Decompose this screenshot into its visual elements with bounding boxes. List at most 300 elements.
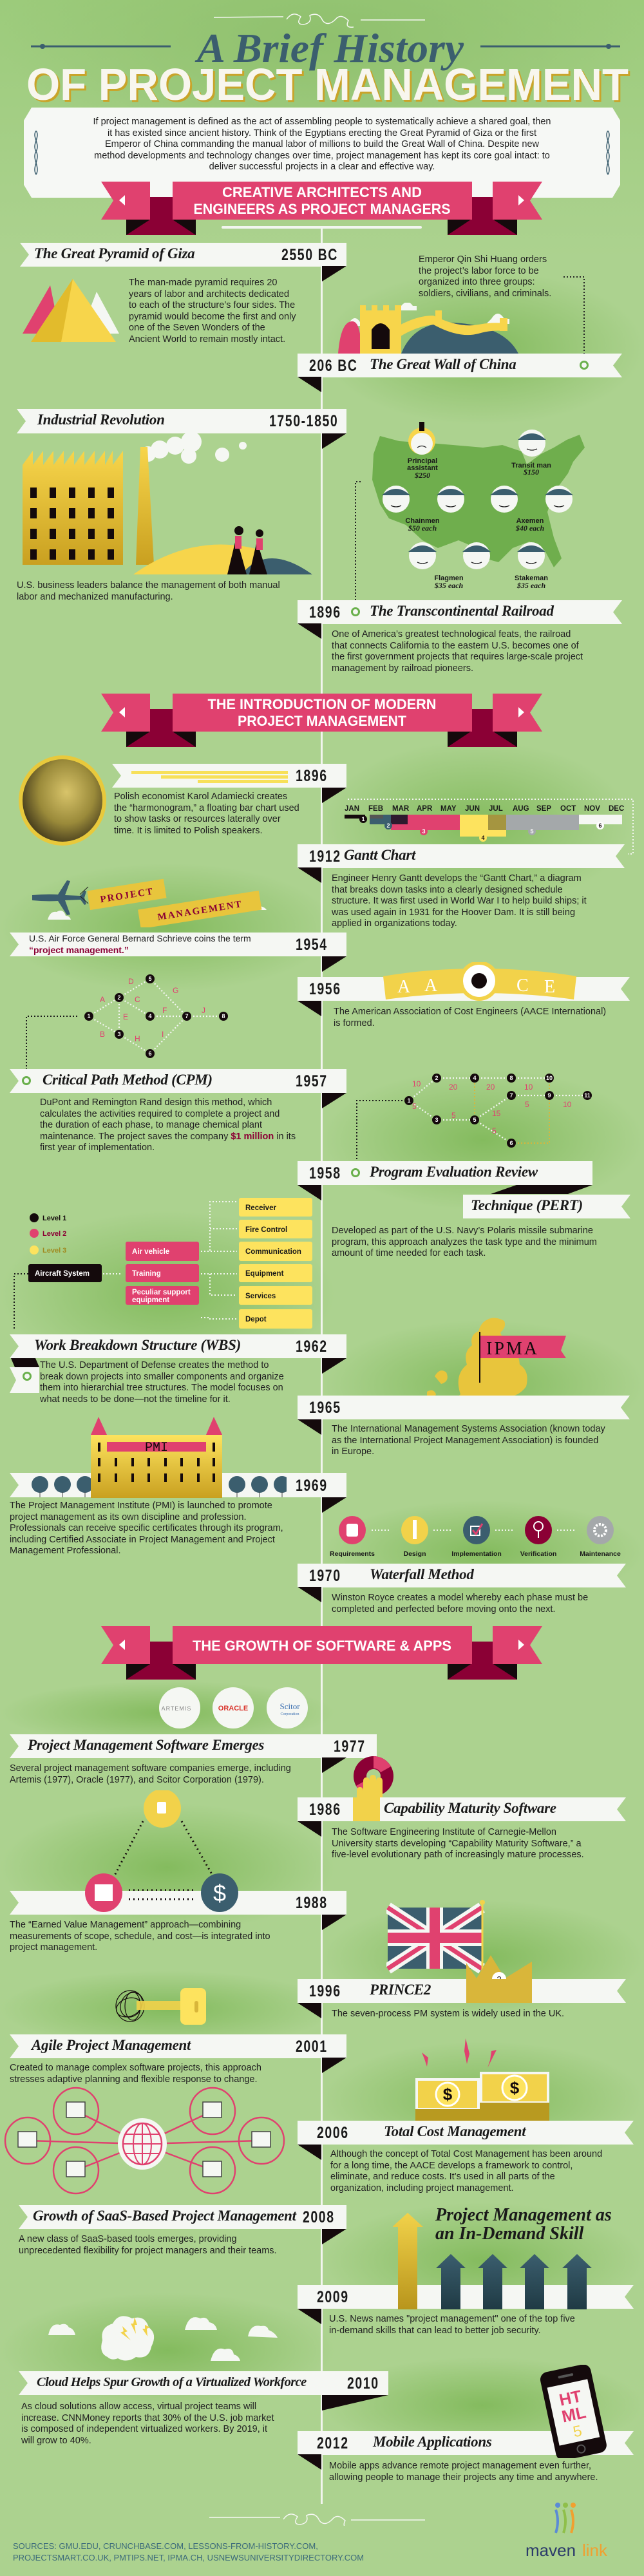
text: CMM: The Software Engineering Institute of Carnegie-Mellon — [332, 1827, 556, 1837]
ribbon: CMM 1986: Capability Maturity Software — [384, 1800, 556, 1816]
text: emperor: Emperor Qin Shi Huang orders — [419, 254, 547, 265]
text: mobile — [329, 2461, 598, 2483]
network diagram: CPM: F — [162, 1006, 167, 1015]
ribbon: virtualized workforce 2010 — [19, 2371, 388, 2395]
logos: artemis, oracle, scitor: Scitor — [279, 1701, 300, 1711]
ribbon: total cost management 2006 — [298, 2121, 634, 2145]
text: software: Several project management software companies emerge, including — [10, 1763, 291, 1774]
WBS diagram: Level 3 — [43, 1247, 66, 1255]
icon: phone HTML5: ML — [560, 2402, 588, 2426]
text: emperor: the project’s labor force to be — [419, 266, 539, 276]
section banner: modern project management: PROJECT MANAGEMENT — [238, 713, 407, 729]
network diagram: PERT: 10 — [546, 1075, 553, 1081]
text: harmonogram — [114, 791, 299, 836]
text: PERT: program, this approach analyzes the task type and the minimum — [332, 1237, 597, 1247]
map: transcontinental railroad workers: Transit man — [511, 462, 551, 469]
ribbon: CPM 1957: 1957 — [296, 1072, 328, 1090]
network diagram: PERT: 10 — [524, 1083, 533, 1092]
gantt chart: 1 — [361, 816, 365, 822]
ribbon: PERT 1958 — [298, 1161, 592, 1185]
text: PMI: The Project Management Institute (PMI) is launched to promote — [10, 1501, 272, 1511]
icon: great wall — [338, 303, 518, 354]
network diagram: PERT: 2 — [435, 1075, 439, 1081]
network diagram: CPM: 7 — [185, 1013, 189, 1019]
map: transcontinental railroad workers: Axemen — [516, 517, 544, 525]
ribbon: CPM 1957 — [10, 1069, 346, 1093]
text: gantt: applied in organizations today. — [332, 918, 457, 929]
heading: in-demand skill — [435, 2206, 629, 2246]
text: total cost — [330, 2149, 602, 2194]
map: transcontinental railroad workers: Chainmen — [405, 517, 440, 525]
text: AACE: The American Association of Cost Engineers (AACE International) — [334, 1007, 606, 1017]
logos: artemis, oracle, scitor — [158, 1687, 309, 1729]
text: railroad: One of America’s greatest technological feats, the railroad — [332, 629, 571, 639]
ribbon: 1896 harmonogram: 1896 — [296, 767, 328, 785]
WBS diagram: Level 1 — [43, 1215, 66, 1222]
ribbon: 1896 harmonogram — [112, 764, 346, 788]
WBS diagram: Level 2 — [43, 1230, 66, 1238]
text: waterfall — [332, 1593, 588, 1615]
intro text box: If project management is defined as the act of assembling people to systematically achieve a shared goal, then — [93, 117, 551, 127]
text: PMI: Professionals can receive specific certificates through its program, — [10, 1523, 283, 1533]
network diagram: CPM: 6 — [148, 1050, 152, 1057]
title: A Brief History — [194, 25, 464, 71]
ribbon: PERT 1958: Program Evaluation Review — [370, 1164, 538, 1180]
map: transcontinental railroad workers: Principal — [408, 457, 437, 465]
ribbon: CMM 1986: 1986 — [309, 1801, 341, 1819]
ribbon: 1954 project management term — [10, 933, 346, 956]
ribbon: agile 2001: 2001 — [296, 2038, 328, 2056]
gantt chart: AUG — [513, 805, 529, 813]
text: IPMA — [332, 1424, 605, 1458]
text: total cost: eliminate, and reduce costs. It’s used in all parts of the — [330, 2172, 555, 2182]
network diagram: PERT: 3 — [435, 1117, 439, 1123]
logo: mavenlink: link — [582, 2541, 608, 2560]
text: pyramid: pyramid would become the first and only — [129, 312, 296, 322]
ribbon: 1956 AACE: 1956 — [309, 980, 341, 998]
badge: AACE — [383, 962, 576, 1001]
WBS diagram: Services — [245, 1293, 276, 1300]
sources: PROJECTSMART.CO.UK, PMTIPS.NET, IPMA.CH, USNEWSUNIVERSITYDIRECTORY.COM — [13, 2553, 364, 2562]
ribbon: 1954 project management term: 1954 — [296, 936, 328, 954]
text: CPM — [40, 1097, 296, 1153]
intro text box: method developments and technology changes over time, project management has kept its core goal intact: to — [94, 151, 550, 161]
WBS diagram: Training — [132, 1270, 161, 1278]
section banner: modern project management — [101, 694, 542, 747]
gantt chart: MAR — [392, 805, 410, 813]
gantt chart: 3 — [422, 828, 426, 835]
portrait: Karol Adamiecki — [19, 755, 106, 846]
network diagram: PERT: 1 — [407, 1097, 411, 1104]
ribbon: technique (PERT) — [463, 1195, 630, 1218]
icon: PMI building: PMI — [145, 1441, 168, 1455]
text: agile: stresses adaptive planning and flexible response to change. — [10, 2074, 258, 2085]
text: 2009: in-demand skills that can lead to better job security. — [329, 2325, 541, 2336]
waterfall phases icons: Maintenance — [580, 1550, 621, 1558]
WBS diagram: Communication — [245, 1248, 301, 1256]
icon: phone HTML5: HT — [558, 2386, 583, 2410]
ribbon: total cost management 2006: 2006 — [317, 2124, 349, 2142]
ribbon: waterfall 1970: 1970 — [309, 1567, 341, 1585]
text: CPM: the duration of each phase, to manage chemical plant — [40, 1120, 262, 1130]
text: PERT — [332, 1226, 597, 1258]
network diagram: PERT — [356, 1074, 592, 1159]
network diagram: PERT: 11 — [584, 1092, 591, 1099]
text: CMM: five-level evolutionary path of increasingly mature processes. — [332, 1850, 584, 1860]
ribbon: PERT 1958: 1958 — [309, 1164, 341, 1182]
map: transcontinental railroad workers: $150 — [523, 468, 539, 477]
gantt chart: 2 — [386, 822, 390, 829]
center timeline line — [321, 229, 323, 2504]
gantt chart: FEB — [368, 805, 383, 813]
map: transcontinental railroad workers: $50 each — [408, 524, 437, 533]
icon: phone HTML5: 5 — [571, 2422, 583, 2441]
gantt chart: DEC — [609, 805, 624, 813]
network diagram: PERT: 15 — [492, 1109, 501, 1118]
gantt chart: OCT — [560, 805, 576, 813]
waterfall phases icons: Requirements — [330, 1550, 375, 1558]
badge: AACE: C — [516, 976, 529, 996]
section banner: creative architects — [101, 182, 542, 235]
text: CPM: maintenance. The project saves the company $1 million in its — [40, 1132, 296, 1142]
ribbon: software emerges 1977: Project Management Software Emerges — [28, 1737, 264, 1753]
ribbon: PMI 1969 — [10, 1473, 346, 1497]
ribbon: software emerges 1977: 1977 — [334, 1738, 366, 1756]
badge: AACE: A — [397, 977, 411, 997]
text: 2010 — [21, 2401, 274, 2447]
ribbon: PRINCE2 1996: 1996 — [309, 1982, 341, 2000]
text: EVM: measurements of scope, schedule, and cost—is integrated into — [10, 1931, 270, 1942]
ribbon: EVM 1988 — [10, 1891, 346, 1915]
text: total cost: organization, including project management. — [330, 2183, 514, 2193]
text: PMI: including Certified Associate in Project Management and Project — [10, 1535, 275, 1545]
text: 2010: increase. CNNMoney reports that 30% of the U.S. job market — [21, 2413, 274, 2423]
text: EVM — [10, 1920, 270, 1954]
network diagram: CPM: G — [173, 986, 178, 995]
text: pyramid: years of labor and architects dedicated — [129, 289, 289, 299]
icon: earned value triangle — [84, 1790, 242, 1914]
ribbon: mobile applications 2012: 2012 — [317, 2434, 349, 2452]
map: transcontinental railroad workers: $250 — [414, 471, 430, 480]
WBS diagram: Peculiar support — [132, 1289, 191, 1296]
title — [26, 14, 630, 103]
gantt chart: JUN — [465, 805, 480, 813]
text: harmonogram: Polish economist Karol Adamiecki creates — [114, 791, 287, 802]
network diagram: PERT: 9 — [547, 1092, 551, 1099]
logos: artemis, oracle, scitor: Corporation — [281, 1712, 299, 1716]
text: industrial revolution: U.S. business leaders balance the management of both manual — [17, 580, 280, 591]
badge: AACE: A — [424, 976, 438, 996]
ribbon: waterfall 1970: Waterfall Method — [370, 1566, 474, 1582]
gantt chart: JUL — [489, 805, 503, 813]
network diagram: PERT: 5 — [525, 1100, 529, 1109]
logos: artemis, oracle, scitor: ARTEMIS — [162, 1705, 191, 1712]
text: mobile: Mobile apps advance remote project management even further, — [329, 2461, 591, 2471]
icon: factory — [23, 433, 312, 574]
network diagram: PERT: 6 — [509, 1140, 513, 1146]
network diagram: PERT: 7 — [509, 1092, 513, 1099]
text: gantt: Engineer Henry Gantt develops the “Gantt Chart,” a diagram — [332, 873, 582, 884]
gantt chart: NOV — [584, 805, 600, 813]
ribbon: IPMA 1965: 1965 — [309, 1399, 341, 1417]
icon: money stacks: $ — [510, 2078, 520, 2098]
ribbon: agile 2001: Agile Project Management — [32, 2037, 191, 2053]
intro text box — [24, 108, 620, 198]
icon: plane with project management banner — [32, 878, 267, 927]
sources: SOURCES: GMU.EDU, CRUNCHBASE.COM, LESSONS-FROM-HISTORY.COM, — [13, 2541, 318, 2551]
text: 2010: will grow to 40%. — [21, 2436, 91, 2446]
network diagram: PERT: 20 — [486, 1083, 495, 1092]
ribbon: WBS 1962: 1962 — [296, 1338, 328, 1356]
waterfall phases icons: Verification — [520, 1550, 556, 1558]
text: software: Artemis (1977), Oracle (1977), and Scitor Corporation (1979). — [10, 1775, 264, 1785]
waterfall phases icons — [325, 1515, 629, 1560]
icon: UK flag and crown — [386, 1899, 535, 1996]
icon: phone HTML5 — [533, 2365, 614, 2458]
icon: earned value triangle: $ — [213, 1880, 226, 1906]
waterfall phases icons: Implementation — [451, 1550, 502, 1558]
text: SaaS: unprecedented flexibility for project managers and their teams. — [19, 2246, 277, 2256]
WBS diagram: Receiver — [245, 1204, 276, 1212]
text: industrial revolution — [17, 580, 280, 602]
text: CPM: DuPont and Remington Rand design this method, which — [40, 1097, 272, 1108]
text: 2010: As cloud solutions allow access, virtual project teams will — [21, 2401, 256, 2412]
text: software — [10, 1763, 291, 1786]
WBS diagram: Fire Control — [245, 1226, 287, 1234]
text: SaaS: A new class of SaaS-based tools emerges, providing — [19, 2234, 237, 2244]
intro text box: it has existed since ancient history. Think of the Egyptians erecting the Great Pyramid of Giza or the first — [108, 128, 536, 138]
section banner: software and apps: THE GROWTH OF SOFTWARE & APPS — [193, 1638, 451, 1654]
ribbon: great wall 206 BC — [298, 354, 622, 377]
icon: clouds with lightning — [48, 2311, 287, 2369]
gantt chart: JAN — [345, 805, 359, 813]
text: pyramid: to each of the structure’s four sides. The — [129, 300, 295, 310]
text: AACE — [334, 1007, 606, 1028]
text: emperor — [419, 254, 551, 299]
network diagram: CPM: 1 — [87, 1013, 91, 1019]
text: emperor: soldiers, civilians, and criminals. — [419, 289, 551, 299]
text: WBS: break down projects into smaller components and organize — [40, 1372, 284, 1382]
text: pyramid: one of the Seven Wonders of the — [129, 323, 265, 333]
text: mobile: allowing people to manage their projects any time and anywhere. — [329, 2472, 598, 2483]
ribbon: WBS 1962 — [10, 1334, 346, 1358]
text: harmonogram: to show tasks or resources laterally over — [114, 814, 281, 824]
ribbon: great pyramid 2550 BC: 2550 BC — [281, 246, 338, 264]
ribbon: 1956 AACE — [298, 977, 630, 1001]
ribbon: software emerges 1977 — [10, 1734, 377, 1758]
ribbon: mobile applications 2012 — [298, 2431, 634, 2455]
ribbon: great wall 206 BC: 206 BC — [309, 357, 357, 375]
ribbon: transcontinental railroad 1896: 1896 — [309, 603, 341, 621]
gantt chart: APR — [417, 805, 433, 813]
network diagram: CPM: 4 — [148, 1013, 152, 1019]
text: waterfall: Winston Royce creates a model whereby each phase must be — [332, 1593, 588, 1603]
ribbon: industrial revolution: 1750-1850 — [269, 412, 338, 430]
icon: UK flag and crown: 2 — [497, 1975, 502, 1984]
text: railroad: that connects California to the eastern U.S. becomes one of — [332, 641, 579, 651]
text: PERT: amount of time needed for each task. — [332, 1248, 486, 1258]
text: IPMA: as the International Project Management Association) is founded — [332, 1435, 598, 1446]
gantt chart: 4 — [481, 835, 485, 841]
text: gantt: structure. It was first used in World War I to help build ships; it — [332, 896, 587, 906]
map: transcontinental railroad workers — [372, 422, 585, 590]
ribbon: great wall 206 BC: The Great Wall of China — [370, 356, 516, 372]
network diagram: PERT: 5 — [451, 1111, 456, 1120]
text: EVM: project management. — [10, 1942, 97, 1953]
map: Europe with IPMA flag — [422, 1317, 570, 1423]
ribbon: 1954 project management term: U.S. Air Force General Bernard Schrieve coins the term — [29, 933, 251, 943]
text: 2009: U.S. News names "project management" one of the top five — [329, 2314, 575, 2324]
gantt chart: MAY — [440, 805, 457, 813]
text: PRINCE2: The seven-process PM system is widely used in the UK. — [332, 2009, 564, 2019]
network diagram: PERT: 20 — [449, 1083, 458, 1092]
network diagram: PERT: 5 — [412, 1102, 417, 1111]
ribbon: CPM 1957: Critical Path Method (CPM) — [43, 1072, 213, 1088]
text: railroad: the first government projects that requires large-scale project — [332, 652, 583, 662]
text: agile — [10, 2063, 261, 2085]
text: railroad — [332, 629, 583, 674]
map: transcontinental railroad workers: $35 each — [516, 581, 545, 590]
map: transcontinental railroad workers: assistant — [407, 464, 438, 472]
ribbon: agile 2001 — [10, 2034, 346, 2058]
text: 2009 — [329, 2314, 575, 2336]
network diagram: CPM: B — [100, 1030, 105, 1039]
network diagram: CPM: E — [123, 1012, 128, 1021]
section banner: modern project management: THE INTRODUCTION OF MODERN — [207, 696, 437, 712]
network diagram: CPM: 3 — [117, 1031, 121, 1037]
section banner: creative architects: CREATIVE ARCHITECTS AND — [222, 184, 422, 200]
text: CMM: University starts developing “Capability Maturity Software,” a — [332, 1839, 582, 1849]
logos: artemis, oracle, scitor: ORACLE — [218, 1705, 248, 1712]
gantt chart: 5 — [530, 828, 534, 835]
ribbon: 2009: 2009 — [317, 2288, 349, 2306]
ribbon: transcontinental railroad 1896: The Transcontinental Railroad — [370, 603, 554, 619]
network diagram: CPM: 5 — [148, 976, 152, 982]
network diagram: CPM: J — [202, 1006, 205, 1015]
ribbon: total cost management 2006: Total Cost Management — [384, 2123, 526, 2139]
text: harmonogram: time. It is limited to Polish speakers. — [114, 826, 262, 836]
text: pyramid: The man-made pyramid requires 20 — [129, 278, 277, 288]
icon: key with scribble — [111, 1988, 207, 2025]
WBS diagram: equipment — [132, 1296, 169, 1304]
ribbon: technique (PERT): Technique (PERT) — [471, 1197, 583, 1213]
ribbon: industrial revolution — [17, 409, 346, 433]
network: globe and laptops — [4, 2087, 287, 2199]
ribbon: SaaS 2008 — [19, 2205, 346, 2229]
network diagram: CPM: 2 — [117, 994, 121, 1001]
text: harmonogram: the “harmonogram,” a floating bar chart used — [114, 803, 299, 813]
text: SaaS — [19, 2234, 277, 2257]
ribbon: great pyramid 2550 BC — [20, 243, 346, 267]
WBS diagram: Aircraft System — [35, 1270, 90, 1278]
map: transcontinental railroad workers: $35 each — [434, 581, 463, 590]
WBS diagram: Equipment — [245, 1270, 284, 1278]
icon: PMI building — [91, 1417, 222, 1498]
text: 2010: is composed of independent virtualized workers. By 2019, it — [21, 2424, 267, 2434]
text: total cost: for a long time, the AACE develops a framework to control, — [330, 2161, 573, 2171]
ribbon: mobile applications 2012: Mobile Applications — [373, 2434, 492, 2450]
network diagram: PERT: 5 — [492, 1126, 497, 1135]
heading: in-demand skill: an In-Demand Skill — [435, 2224, 583, 2244]
logo: mavenlink — [526, 2502, 619, 2560]
ribbon: EVM 1988: 1988 — [296, 1894, 328, 1912]
WBS diagram: Depot — [245, 1316, 267, 1323]
intro text box: deliver successful projects in a clear and effective way. — [209, 162, 435, 172]
text: WBS: The U.S. Department of Defense creates the method to — [40, 1360, 269, 1370]
ribbon: 2009 — [298, 2285, 634, 2309]
text: WBS: what needs to be done—not the timeline for it. — [40, 1394, 231, 1405]
ribbon: IPMA 1965 — [298, 1396, 630, 1419]
map: Europe with IPMA flag: IPMA — [486, 1339, 539, 1359]
text: pyramid: Ancient World to remain mostly intact. — [129, 334, 285, 345]
icon: money stacks — [415, 2038, 551, 2121]
icon: pyramid — [23, 279, 119, 342]
text: CPM: calculates the activities required to complete a project and — [40, 1109, 279, 1119]
text: CMM — [332, 1827, 584, 1861]
WBS diagram — [14, 1198, 312, 1329]
gantt chart: SEP — [536, 805, 551, 813]
icon: lifebuoy and hand — [352, 1756, 395, 1820]
icon: plane with project management banner: MANAGEMENT — [156, 899, 243, 923]
ribbon: PMI 1969: 1969 — [296, 1477, 328, 1495]
sources — [13, 2541, 374, 2564]
ribbon: virtualized workforce 2010: Cloud Helps Spur Growth of a Virtualized Workforce — [37, 2375, 307, 2389]
ribbon: WBS 1962: Work Breakdown Structure (WBS) — [34, 1337, 241, 1353]
network diagram: PERT: 10 — [412, 1079, 421, 1088]
ribbon: great pyramid 2550 BC: The Great Pyramid of Giza — [34, 245, 194, 261]
text: AACE: is formed. — [334, 1018, 375, 1028]
ribbon: transcontinental railroad 1896 — [298, 600, 622, 624]
ribbon: 1912 gantt chart — [298, 844, 625, 868]
text: pyramid — [129, 278, 296, 345]
network diagram: PERT: 10 — [563, 1100, 572, 1109]
text: waterfall: completed and perfected before moving onto the next. — [332, 1604, 555, 1615]
ribbon: virtualized workforce 2010: 2010 — [347, 2374, 379, 2392]
heading: in-demand skill: Project Management as — [435, 2205, 612, 2225]
text: agile: Created to manage complex software projects, this approach — [10, 2063, 261, 2073]
ribbon: SaaS 2008: 2008 — [303, 2208, 335, 2226]
text: IPMA: in Europe. — [332, 1446, 374, 1457]
text: PMI: project management as its own discipline and profession. — [10, 1512, 247, 1522]
icon: plane with project management banner: PROJECT — [99, 886, 155, 905]
network diagram: PERT: 8 — [509, 1075, 513, 1081]
waterfall phases icons: Design — [403, 1550, 426, 1558]
intro text box: Emperor of China commanding the manual labor of millions to build the Great Wall of China. Despite new — [105, 139, 539, 149]
text: PERT: Developed as part of the U.S. Navy’s Polaris missile submarine — [332, 1226, 593, 1236]
section banner: software and apps — [101, 1626, 542, 1680]
chart: growth arrows — [393, 2211, 596, 2309]
text: gantt: that breaks down tasks into a clearly designed schedule — [332, 885, 563, 895]
text: IPMA: The International Management Systems Association (known today — [332, 1424, 605, 1434]
logo: mavenlink: maven — [526, 2541, 576, 2560]
text: emperor: organized into three groups: — [419, 277, 535, 287]
icon: money stacks: $ — [443, 2085, 453, 2104]
network diagram: CPM: A — [100, 995, 105, 1004]
text: EVM: The “Earned Value Management” approach—combining — [10, 1920, 241, 1930]
text: gantt — [332, 873, 587, 929]
ribbon: 1912 gantt chart: Gantt Chart — [344, 847, 415, 863]
ribbon: CMM 1986 — [298, 1797, 626, 1821]
text: CPM: first year of implementation. — [40, 1142, 155, 1153]
gantt chart — [345, 799, 634, 855]
ribbon: 1912 gantt chart: 1912 — [309, 848, 341, 866]
gantt chart: 6 — [598, 822, 602, 829]
WBS diagram: Air vehicle — [132, 1248, 169, 1256]
text: industrial revolution: labor and mechanized manufacturing. — [17, 592, 173, 602]
text: PMI — [10, 1501, 283, 1557]
network diagram: PERT: 5 — [473, 1117, 477, 1123]
ribbon: PRINCE2 1996 — [298, 1979, 626, 2003]
